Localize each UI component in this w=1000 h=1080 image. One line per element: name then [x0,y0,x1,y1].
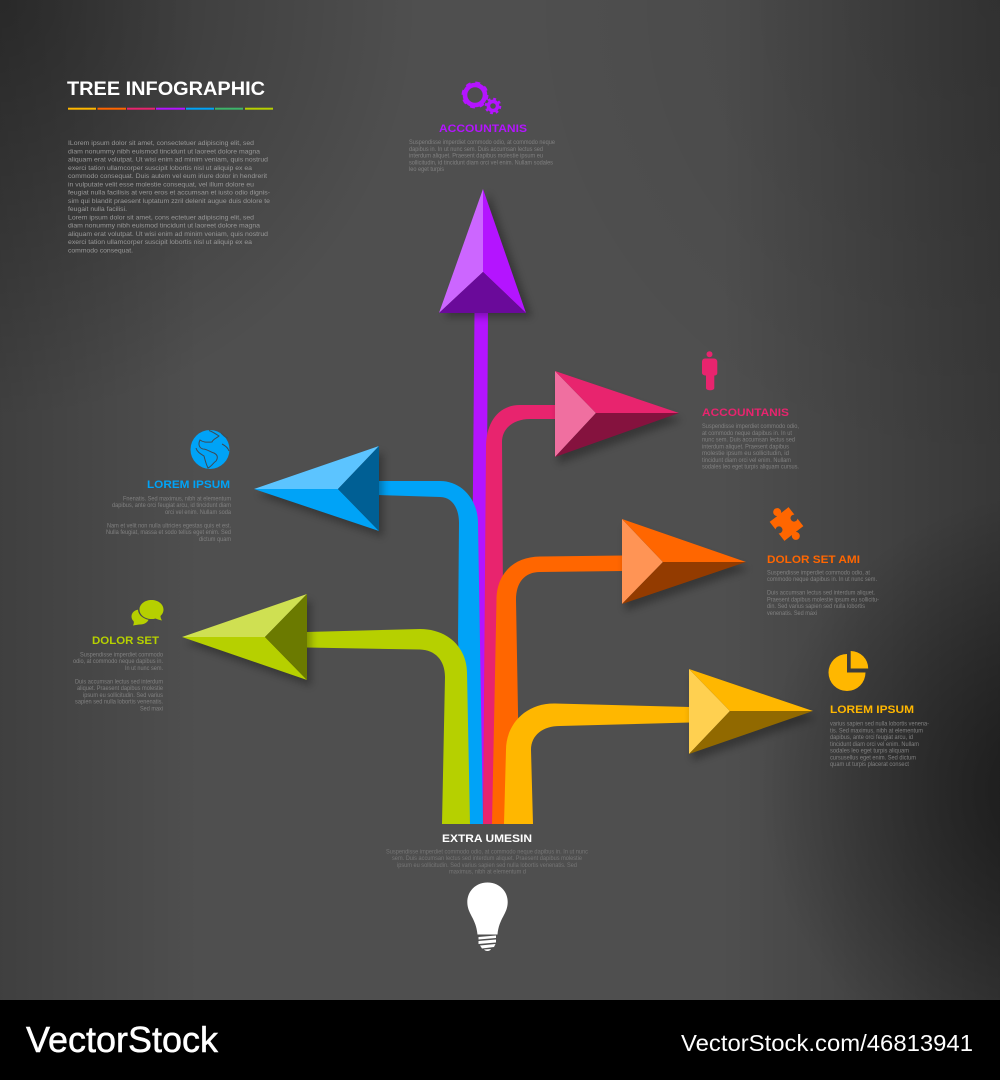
panel: yellow lorem ipsum [829,651,929,768]
body text [106,495,231,543]
body text: nunc sem. Duis accumsan lectus sed [702,437,795,444]
branch: pink line and arrow [483,371,682,824]
intro text: commodo consequat. Duis autem vel eum iriure dolor in hendrerit [68,173,267,180]
heading: LOREM IPSUM [147,479,230,491]
body text: tis. Sed maximus, nibh at elementum [830,727,923,734]
panel: top accountants [409,83,555,173]
body text: at commodo neque dapibus in. In ut [702,430,792,437]
icon: puzzle piece [765,502,808,546]
intro text: commodo consequat. [68,247,133,254]
body text: dapibus, ante orci feugiat arcu, id tincidunt diam [112,502,231,509]
body text: quam ut turpis placerat consect [830,761,909,768]
body text: odio, at commodo neque dapibus in. [73,658,163,665]
intro text: sim qui blandit praesent luptatum zzril delenit augue duis dolore te [68,198,270,205]
body text: Nam et velit non nulla ultricies egestas quis et est. [107,522,231,529]
intro text: aliquam erat volutpat. Ut wisi enim ad minim veniam, quis nostrud [68,231,268,238]
body text: sapien sed nulla lobortis venenatis. [75,699,163,706]
heading: DOLOR SET AMI [767,554,860,566]
icon: person [702,351,717,390]
icon: light bulb [467,882,508,951]
branch: purple line and arrow [439,189,532,824]
body text: maximus, nibh at elementum d [449,869,526,876]
body text: Suspendisse imperdiet commodo odio, at [767,569,870,576]
body text: cursusellus eget enim. Sed dictum [830,754,916,761]
footer logo: VectorStock [26,1019,219,1060]
body text: In ut nunc sem. [125,665,163,672]
intro text: diam nonummy nibh euismod tincidunt ut laoreet dolore magna [68,148,260,155]
body text [767,569,879,617]
panel: green dolor set [73,599,165,712]
body text [73,651,163,712]
title: TREE INFOGRAPHIC [67,78,265,100]
intro text: exerci tation ullamcorper suscipit lobortis nisl ut aliquip ex ea [68,165,252,172]
body text: orci vel enim. Nullam soda [165,509,231,516]
body text: Duis accumsan lectus sed interdum aliquet. [767,590,875,597]
tree chart: branches and arrows [182,189,816,824]
body text: aliquet. Praesent dapibus molestie [77,685,163,692]
body text: Fnenatis. Sed maximus, nibh at elementum [123,495,231,502]
intro text: in vulputate velit esse molestie consequat, vel illum dolore eu [68,181,254,188]
body text [830,721,929,768]
body text: tincidunt diam orci vel enim. Nullam [702,457,791,464]
panel: title and intro [67,78,273,254]
icon: speech bubbles [132,599,165,626]
heading: ACCOUNTANIS [439,123,527,135]
body text: interdum aliquet. Praesent dapibus [702,443,789,450]
body text: Praesent dapibus molestie ipsum eu sollicitu- [767,596,879,603]
body text [386,848,589,876]
intro text: ILorem ipsum dolor sit amet, consectetuer adipiscing elit, sed [68,140,254,147]
body text: din. Sed varius sapien sed nulla lobortis [767,603,865,610]
body text: sodales leo eget turpis aliquam cursus. [702,464,799,471]
body text: molestie ipsum eu sollicitudin, id [702,450,789,457]
body text: leo eget turpis [409,166,444,173]
intro text: exerci tation ullamcorper suscipit lobortis nisl ut aliquip ex ea [68,239,252,246]
heading: LOREM IPSUM [830,704,914,716]
body text: Suspendisse imperdiet commodo odio, at commodo neque [409,139,555,146]
body text: Suspendisse imperdiet commodo [80,651,163,658]
body text: varius sapien sed nulla lobortis venena- [830,721,929,728]
body text: dapibus, ante orci feugiat arcu, id [830,734,913,741]
intro text: feugait nulla facilisi. [68,206,127,213]
heading: ACCOUNTANIS [702,407,789,419]
panel: extra umesin [386,833,589,951]
intro text: diam nonummy nibh euismod tincidunt ut laoreet dolore magna [68,223,260,230]
intro text [68,140,270,254]
branch: orange line and arrow [492,519,749,824]
body text [409,139,555,173]
body text: ipsum eu sollicitudin. Sed varius sapien sed nulla lobortis venenatis. Sed [397,862,577,869]
footer bar [0,1000,1000,1080]
body text: commodo neque dapibus in. In ut nunc sem. [767,576,877,583]
branch: green line and arrow [182,594,470,824]
intro text: feugiat nulla facilisis at vero eros et accumsan et iusto odio dignis- [68,190,270,197]
body text: tincidunt diam orci vel enim. Nullam [830,741,919,748]
body text: dictum quam [199,536,231,543]
body text: ipsum eu sollicitudin. Sed varius [83,692,163,699]
intro text: aliquam erat volutpat. Ut wisi enim ad minim veniam, quis nostrud [68,156,268,164]
body text: Sed maxi [140,706,163,712]
body text [702,423,799,471]
icon: pie chart [829,651,868,691]
body text: sodales leo eget turpis aliquam [830,748,909,755]
panel: blue lorem ipsum [106,430,231,543]
footer url: VectorStock.com/46813941 [681,1030,973,1056]
body text: Suspendisse imperdiet commodo odio, [702,423,799,430]
icon: globe [190,430,230,469]
colour bar under title [68,108,273,110]
body text: sem. Duis accumsan lectus sed interdum aliquet. Praesent dapibus molestie [392,855,582,862]
body text: Nulla feugiat, massa et sodo tellus eget enim. Sed [106,529,231,536]
branch: blue line and arrow [254,446,483,824]
branch: yellow line and arrow [504,669,816,824]
body text: interdum aliquet. Praesent dapibus molestie ipsum eu [409,152,543,160]
body text: Duis accumsan lectus sed interdum [75,678,163,685]
body text: Suspendisse imperdiet commodo odio, at commodo neque dapibus in. In ut nunc [386,848,589,855]
heading: EXTRA UMESIN [442,833,532,845]
panel: orange dolor set ami [765,502,879,617]
heading: DOLOR SET [92,635,159,647]
body text: venenatis. Sed maxi [767,610,817,617]
intro text: Lorem ipsum dolor sit amet, cons ectetuer adipiscing elit, sed [68,214,254,221]
body text: dapibus in. In ut nunc sem. Duis accumsan lectus sed [409,146,543,153]
icon: gears [463,83,500,113]
body text: sollicitudin, id tincidunt diam orci vel enim. Nullam sodales [409,159,553,166]
panel: pink accountants [702,351,799,471]
